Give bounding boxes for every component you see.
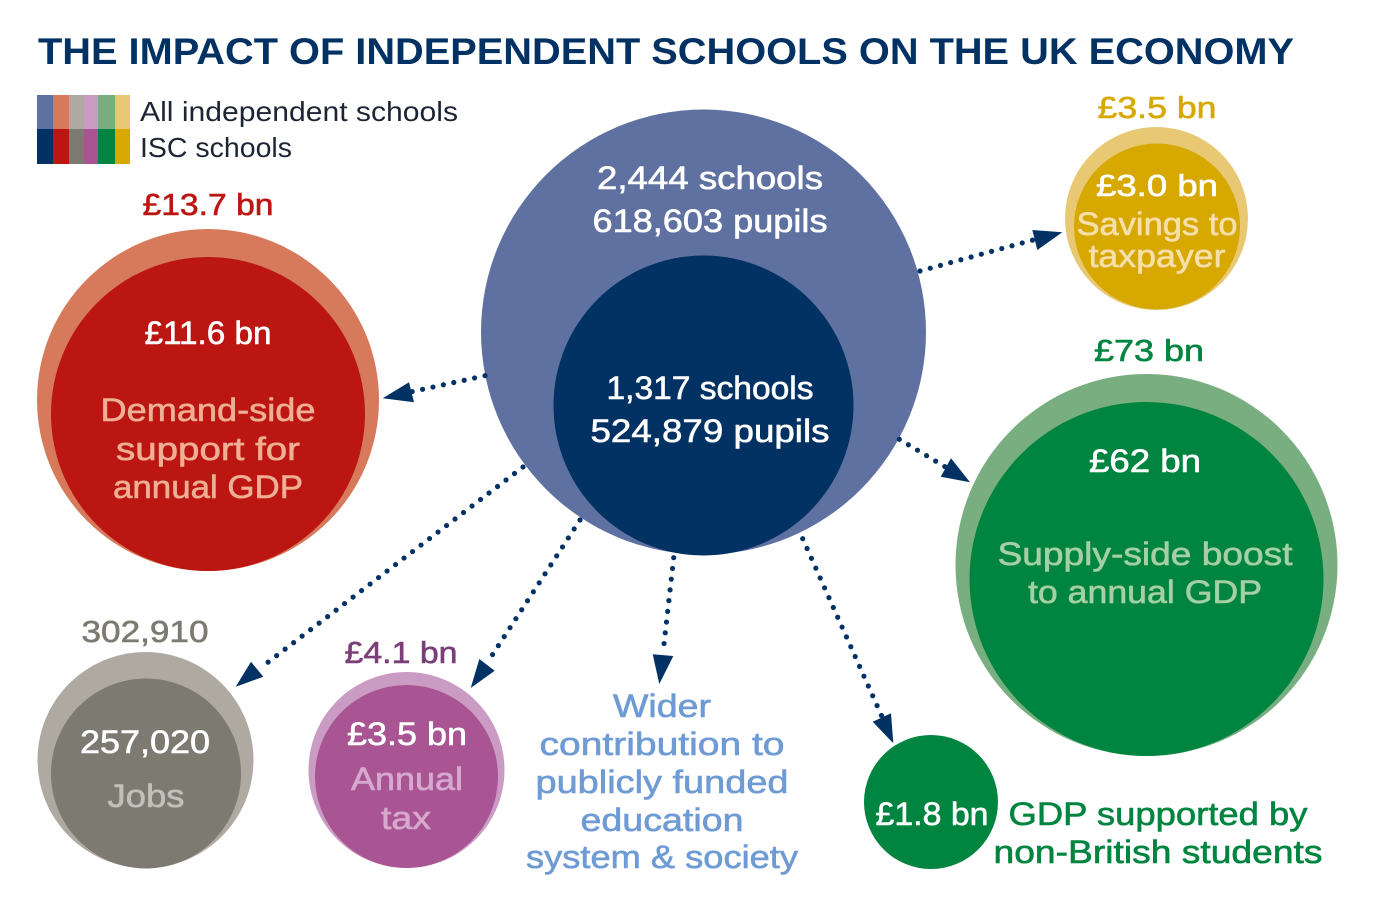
panel: supply-side GDP: £73 bn [1094,333,1204,368]
legend [37,95,458,164]
panel: supply-side GDP: Supply-side boost [998,536,1293,572]
central circle: all schools and ISC schools [481,110,926,556]
panel: non-British students: non-British students [994,834,1322,870]
text block: wider contribution: education [580,802,744,838]
central circle: all schools and ISC schools: 1,317 schools [606,370,814,406]
text block: wider contribution: Wider [613,688,711,724]
arrow: to jobs [236,467,523,687]
panel: savings to taxpayer: taxpayer [1088,238,1226,274]
panel: jobs: Jobs [108,778,184,814]
central circle: all schools and ISC schools: 2,444 schools [597,160,823,196]
panel: annual tax: tax [381,800,431,836]
panel: demand-side GDP: £11.6 bn [144,315,272,351]
panel: demand-side GDP [37,187,379,571]
panel: savings to taxpayer: £3.0 bn [1096,168,1218,203]
panel: jobs [38,614,254,868]
panel: savings to taxpayer [1065,90,1248,310]
text block: wider contribution: publicly funded [536,764,788,800]
text block: wider contribution: system & society [526,839,798,875]
panel: supply-side GDP: £62 bn [1089,443,1201,479]
panel: savings to taxpayer: Savings to [1076,206,1238,242]
legend: ISC schools [140,132,292,163]
arrow: to savings [920,230,1062,271]
arrow: to supply-side [899,439,970,482]
central circle: all schools and ISC schools: 618,603 pupils [592,203,828,239]
panel: annual tax: £4.1 bn [344,635,458,670]
panel: supply-side GDP [956,333,1338,756]
central circle: all schools and ISC schools: 524,879 pupils [590,413,830,449]
title: THE IMPACT OF INDEPENDENT SCHOOLS ON THE UK ECONOMY [38,31,1294,72]
panel: non-British students: £1.8 bn [876,796,988,832]
arrow: to wider contribution [653,558,674,684]
panel: annual tax: Annual [351,761,463,797]
text block: wider contribution: contribution to [540,726,784,762]
arrow: to demand-side [383,376,485,402]
panel: demand-side GDP: £13.7 bn [142,187,274,222]
panel: demand-side GDP: support for [116,431,300,467]
arrow: to tax [471,520,580,688]
panel: non-British students [864,735,1322,870]
panel: non-British students: GDP supported by [1008,796,1308,832]
text block: wider contribution [526,688,798,875]
panel: jobs: 257,020 [80,724,210,760]
arrow: to non-British students [803,539,893,743]
panel: annual tax: £3.5 bn [347,716,467,752]
panel: demand-side GDP: Demand-side [100,392,316,428]
panel: savings to taxpayer: £3.5 bn [1098,90,1216,125]
panel: jobs: 302,910 [82,614,208,649]
legend: All independent schools [140,96,458,127]
panel: supply-side GDP: to annual GDP [1028,574,1262,610]
panel: demand-side GDP: annual GDP [113,469,303,505]
panel: annual tax [308,635,504,868]
